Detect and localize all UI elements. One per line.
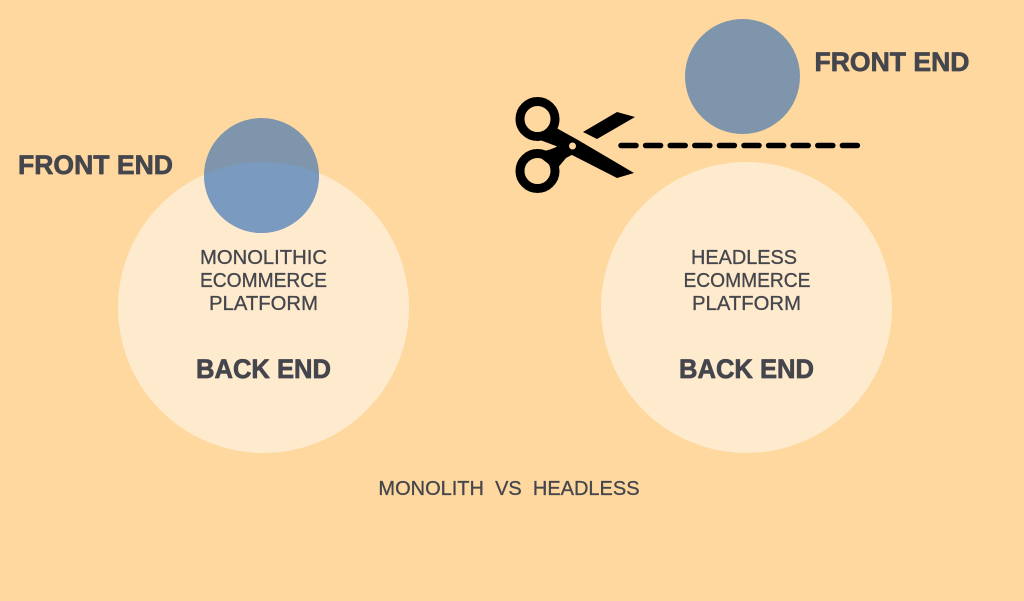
text: headless ecommerce platform: PLATFORM	[692, 293, 801, 315]
heading: headless front end: FRONT END	[814, 47, 970, 77]
heading: monolith back end: BACK END	[196, 354, 331, 384]
heading: monolith front end: FRONT END	[18, 150, 173, 180]
arrow: dashed cut line	[621, 143, 860, 148]
text: headless ecommerce platform: HEADLESS	[691, 247, 797, 269]
text: monolithic ecommerce platform: ECOMMERCE	[200, 270, 327, 292]
icon: headless front end circle	[685, 19, 800, 134]
text: monolithic ecommerce platform	[200, 247, 327, 315]
text: monolithic ecommerce platform: MONOLITHIC	[200, 247, 327, 269]
panel: monolithic back end circle	[118, 162, 409, 453]
icon: scissors	[520, 102, 635, 188]
text: monolithic ecommerce platform: PLATFORM	[209, 293, 318, 315]
caption: monolith vs headless: MONOLITH VS HEADLESS	[378, 478, 640, 500]
heading: headless back end: BACK END	[679, 354, 814, 384]
text: headless ecommerce platform: ECOMMERCE	[684, 270, 810, 292]
panel: headless back end circle	[601, 162, 892, 453]
icon: monolithic front end circle	[204, 118, 319, 233]
text: headless ecommerce platform	[684, 247, 810, 315]
